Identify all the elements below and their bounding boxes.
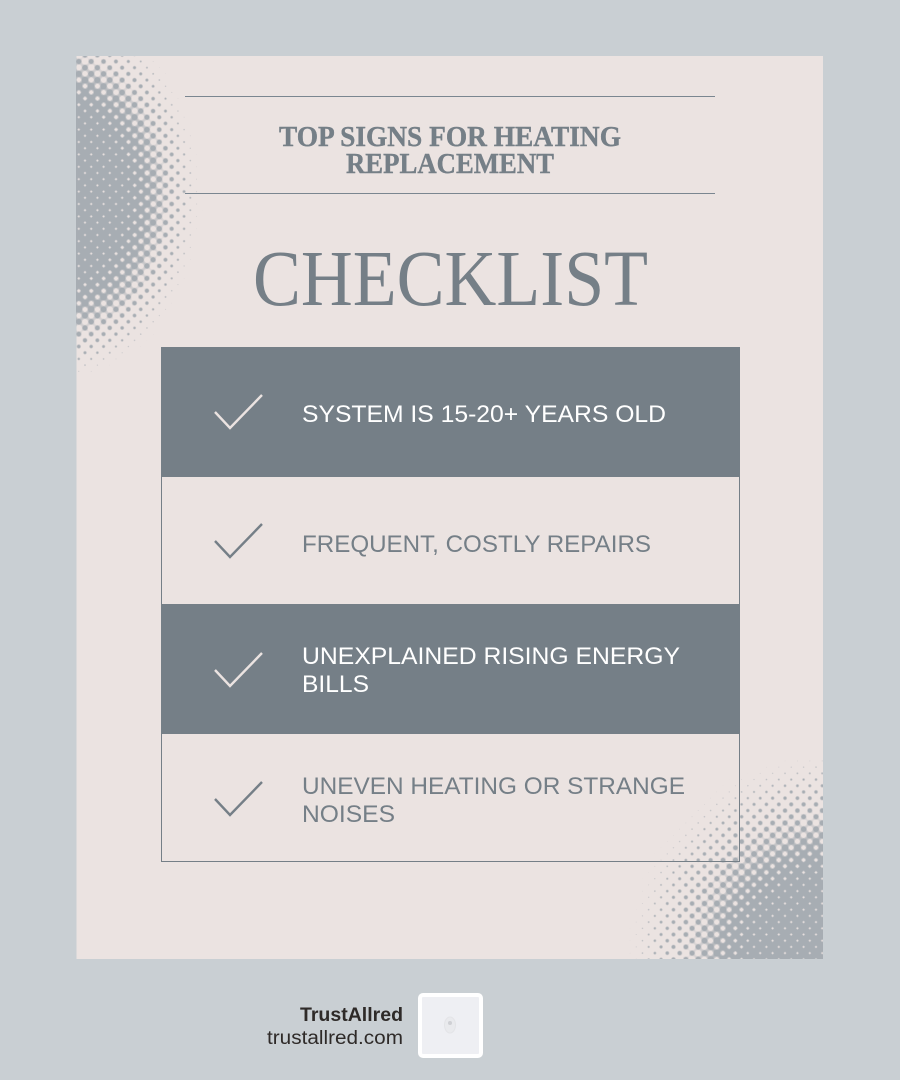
row 2: repairs: FREQUENT, COSTLY REPAIRS xyxy=(302,531,651,558)
row 3: energy bills xyxy=(161,604,740,734)
checklist table xyxy=(161,347,740,862)
footer brand text xyxy=(267,1005,403,1049)
row 2: repairs xyxy=(215,524,651,558)
row 4: uneven heating xyxy=(215,773,685,828)
title xyxy=(279,121,621,180)
halftone decoration: bottom right xyxy=(620,755,823,959)
infographic canvas xyxy=(76,56,823,1058)
title: REPLACEMENT xyxy=(346,148,554,180)
halftone decoration: top left xyxy=(76,56,206,376)
row 4: uneven heating: NOISES xyxy=(302,801,395,828)
heading: checklist: CHECKLIST xyxy=(253,236,648,323)
row 3: energy bills: UNEXPLAINED RISING ENERGY xyxy=(302,643,680,670)
footer brand text: trustallred.com xyxy=(267,1028,403,1049)
row 3: energy bills: BILLS xyxy=(302,671,369,698)
panel: checklist card xyxy=(76,56,823,959)
row 1: system age xyxy=(161,347,740,477)
logo tile xyxy=(420,995,481,1056)
title: TOP SIGNS FOR HEATING xyxy=(279,121,621,153)
footer brand text: TrustAllred xyxy=(300,1005,403,1026)
row 1: system age: SYSTEM IS 15-20+ YEARS OLD xyxy=(302,401,666,428)
row 4: uneven heating: UNEVEN HEATING OR STRANGE xyxy=(302,773,685,800)
